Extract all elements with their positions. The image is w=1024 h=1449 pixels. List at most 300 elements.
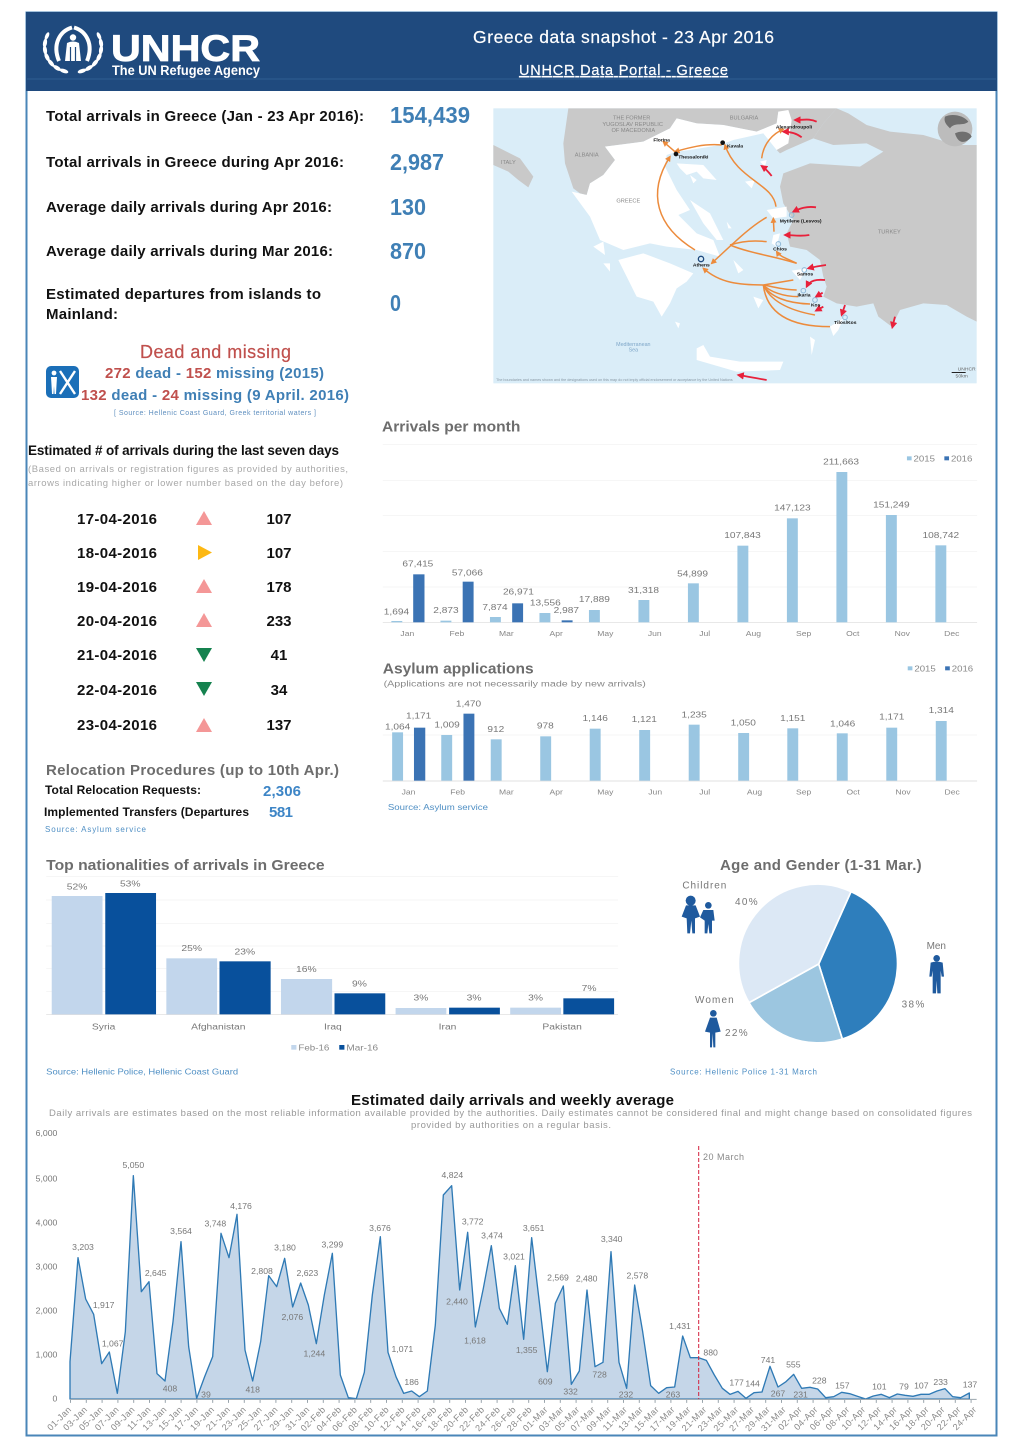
map labels [501, 115, 901, 354]
map labels: Alexandroupoli [776, 125, 813, 131]
row 22 Apr [77, 682, 288, 699]
value labels [72, 1160, 977, 1399]
legend: asylum [908, 663, 973, 673]
map labels: Mytilene (Lesvos) [780, 219, 822, 225]
legend: asylum: 2015 [914, 663, 936, 673]
header band [26, 12, 997, 91]
date axis labels: 09-Jan [109, 1404, 137, 1433]
heading: arrivals per month: Arrivals per month [382, 419, 520, 435]
value labels: 232 [619, 1389, 633, 1399]
y axis labels: 6,000 [36, 1128, 58, 1138]
bar chart: nationalities: 52% [67, 882, 88, 892]
bar chart: arrivals per month [383, 444, 977, 638]
date axis labels: 27-Jan [252, 1404, 280, 1433]
source: Source: Asylum service [45, 825, 147, 834]
date axis labels: 22-Apr [935, 1404, 963, 1432]
bar chart: asylum applications: Apr [550, 788, 563, 797]
bar chart: nationalities: Afghanistan [191, 1022, 246, 1032]
value labels: 3,676 [369, 1223, 391, 1233]
note: Daily arrivals are estimates based on the most reliable information available provided by the authorities. Daily estimates cannot be considered final and might change based on consolidated figures [49, 1108, 972, 1119]
value labels: 1,244 [303, 1348, 325, 1358]
value labels: 101 [872, 1382, 887, 1392]
red sea crossing arrows [738, 120, 895, 380]
value labels: 741 [761, 1355, 775, 1365]
value labels: 228 [812, 1376, 827, 1386]
map labels: Florina [653, 137, 670, 143]
stat: March daily average: 870 [390, 238, 426, 264]
bar chart: asylum applications: 1,046 [830, 718, 855, 728]
legend: arrivals: 2016 [951, 453, 972, 463]
bar chart: nationalities: Iraq [324, 1022, 342, 1032]
map labels: Athens [693, 263, 710, 269]
row 21 Apr [77, 647, 287, 664]
map labels: Kavala [727, 144, 743, 150]
row 18 Apr: 107 [266, 545, 292, 562]
bar chart: nationalities: 25% [181, 944, 203, 954]
value labels: 5,050 [122, 1160, 144, 1170]
y axis labels: 2,000 [36, 1305, 58, 1315]
value labels: 1,071 [391, 1344, 413, 1354]
stat: departures: 0 [390, 290, 401, 316]
panel: relocation procedures [44, 762, 339, 834]
date axis labels: 28-Feb [505, 1404, 534, 1433]
bar chart: asylum applications: Jan [402, 788, 415, 797]
date axis labels: 12-Feb [378, 1404, 407, 1433]
bar chart: nationalities: 7% [582, 984, 597, 994]
value labels: 1,067 [102, 1339, 124, 1349]
sea [493, 108, 977, 383]
map labels: ALBANIA [575, 153, 599, 159]
value labels: 609 [538, 1377, 553, 1387]
pie labels: 22% [725, 1028, 748, 1039]
bar chart: nationalities: 3% [414, 993, 429, 1003]
row 19 Apr [77, 579, 292, 596]
date axis labels: 18-Apr [903, 1404, 931, 1432]
bar chart: nationalities: 23% [235, 947, 256, 957]
bar chart: arrivals per month: 13,556 [530, 597, 561, 608]
value labels: 1,431 [669, 1321, 691, 1331]
note: provided by authorities on a regular basis. [411, 1120, 611, 1131]
value labels: 144 [745, 1378, 760, 1388]
date axis labels: 04-Feb [314, 1404, 343, 1433]
value labels: 2,578 [626, 1271, 648, 1281]
bar chart: arrivals per month: 31,318 [628, 585, 659, 595]
date axis labels: 07-Jan [93, 1404, 121, 1433]
date axis labels: 14-Apr [871, 1404, 899, 1432]
bar chart: asylum applications: 978 [537, 720, 554, 731]
date axis labels: 15-Mar [632, 1404, 661, 1433]
value labels: 3,021 [503, 1252, 525, 1262]
area and line [70, 1176, 969, 1399]
bar chart: asylum applications: 1,146 [583, 713, 608, 723]
row 19 Apr: 19-04-2016 [77, 579, 157, 596]
bar chart: asylum applications: 1,064 [385, 721, 410, 732]
bar chart: asylum applications: Jun [648, 788, 662, 797]
panel: age and gender [670, 857, 946, 1076]
bar chart: arrivals per month: Nov [895, 630, 910, 638]
stat: total arrivals: 154,439 [390, 102, 470, 128]
date axis labels: 31-Mar [759, 1404, 788, 1433]
date axis labels: 04-Apr [792, 1404, 820, 1432]
heading: Relocation Procedures (up to 10th Apr.) [46, 762, 339, 779]
map labels: YUGOSLAV REPUBLIC [602, 122, 663, 128]
stat: departures: Mainland: [46, 306, 118, 323]
date axis labels: 27-Mar [727, 1404, 756, 1433]
bar chart: nationalities [46, 877, 618, 1032]
date axis labels: 14-Feb [394, 1404, 423, 1433]
date axis labels: 20-Apr [919, 1404, 947, 1432]
value labels: 3,474 [481, 1231, 503, 1241]
bar chart: nationalities: 53% [120, 879, 141, 889]
note: arrows indicating higher or lower number based on the day before) [28, 478, 343, 489]
source: Source: Hellenic Police 1-31 March [670, 1067, 817, 1076]
date axis labels: 01-Jan [45, 1404, 73, 1433]
legend: asylum: 2016 [952, 663, 973, 673]
value labels: 408 [163, 1384, 177, 1394]
date axis labels: 17-Mar [648, 1404, 677, 1433]
transfers: Implemented Transfers (Departures [44, 805, 249, 819]
value labels: 4,824 [441, 1170, 463, 1180]
date axis labels: 16-Apr [887, 1404, 915, 1432]
date axis labels: 26-Feb [489, 1404, 518, 1433]
value labels: 3,564 [170, 1226, 192, 1236]
value labels: 263 [666, 1389, 680, 1399]
stat: April daily average: Average daily arrivals during Apr 2016: [46, 199, 332, 216]
requests: Total Relocation Requests: [45, 783, 201, 797]
bar chart: asylum applications: 1,314 [929, 705, 954, 715]
legend [291, 1043, 378, 1053]
date axis labels: 05-Jan [77, 1404, 105, 1433]
heading: Dead and missing [140, 342, 291, 362]
scale bar and disclaimer [496, 367, 976, 382]
legend: Feb-16 [298, 1043, 329, 1053]
value labels: 39 [201, 1389, 211, 1399]
bar chart: asylum applications: 1,171 [406, 710, 431, 721]
bar chart: asylum applications: Aug [747, 788, 762, 797]
note [28, 464, 348, 489]
map markers [674, 140, 847, 320]
value labels: 157 [835, 1380, 850, 1390]
bar chart: asylum applications: Dec [945, 788, 960, 797]
bar chart: asylum applications: Mar [499, 788, 514, 797]
charts: arrivals and asylum [382, 419, 977, 812]
date axis labels: 21-Mar [680, 1404, 709, 1433]
pie labels: 40% [735, 897, 758, 908]
map labels: Samos [797, 272, 813, 278]
value labels: 880 [703, 1347, 718, 1357]
date axis labels: 17-Jan [172, 1404, 200, 1433]
marker: 20 March: 20 March [703, 1152, 744, 1162]
bar chart: arrivals per month: Jan [400, 630, 414, 638]
bar chart: asylum applications: 1,121 [632, 714, 657, 724]
y axis labels: 4,000 [36, 1217, 58, 1227]
value labels: 3,651 [523, 1223, 545, 1233]
pie labels [682, 880, 946, 1039]
heading: Estimated # of arrivals during the last seven days [28, 443, 339, 458]
bar chart: asylum applications: 1,171 [879, 711, 904, 721]
value labels: 728 [592, 1369, 607, 1379]
bar chart: arrivals per month: May [597, 630, 613, 638]
row 23 Apr: 137 [266, 717, 292, 734]
pie labels: Women [695, 995, 734, 1006]
bar chart: arrivals per month: 7,874 [482, 602, 508, 612]
date axis labels: 23-Mar [696, 1404, 725, 1433]
map labels: TURKEY [878, 229, 901, 235]
date axis labels: 02-Apr [776, 1404, 804, 1432]
date axis labels: 31-Jan [283, 1404, 312, 1433]
row 19 Apr: 178 [266, 579, 292, 596]
value labels: 2,645 [145, 1268, 167, 1278]
value labels: 107 [914, 1380, 929, 1390]
value labels: 3,340 [601, 1234, 623, 1244]
row 23 Apr: 23-04-2016 [77, 717, 157, 734]
bar chart: asylum applications: Jul [699, 788, 710, 797]
source: asylum: Source: Asylum service [388, 803, 488, 812]
portal link: UNHCR Data Portal - Greece [519, 63, 728, 79]
bar chart: arrivals per month: 26,971 [503, 586, 534, 596]
note: asylum: (Applications are not necessarily made by new arrivals) [384, 679, 646, 689]
bar chart: arrivals per month: 107,843 [724, 530, 761, 540]
bar chart: arrivals per month: Oct [846, 630, 860, 638]
date axis labels: 23-Jan [220, 1404, 248, 1433]
map labels: THE FORMER [613, 115, 650, 121]
date axis labels: 03-Jan [61, 1404, 89, 1433]
value labels: 3,772 [462, 1216, 484, 1226]
bar chart: nationalities: Syria [92, 1022, 116, 1032]
bar chart: arrivals per month: Jul [699, 630, 710, 638]
row 17 Apr [77, 511, 292, 528]
row 18 Apr: 18-04-2016 [77, 545, 157, 562]
row 21 Apr: 41 [271, 647, 287, 664]
icon: man [929, 955, 944, 993]
row 21 Apr: 21-04-2016 [77, 647, 157, 664]
date axis labels: 21-Jan [204, 1404, 232, 1433]
legend: arrivals: 2015 [914, 453, 935, 463]
land: Greece [572, 110, 843, 372]
date axis labels: 02-Feb [299, 1404, 328, 1433]
pie chart [738, 884, 898, 1043]
stat: April daily average [46, 194, 426, 220]
heading: Estimated daily arrivals and weekly average [351, 1092, 674, 1109]
tagline: The UN Refugee Agency [112, 63, 260, 78]
map of Greece and arrival routes [493, 108, 977, 383]
requests [45, 783, 301, 800]
source: [ Source: Hellenic Coast Guard, Greek territorial waters ] [114, 410, 316, 417]
axis [70, 1399, 977, 1401]
bar chart: asylum applications: 912 [487, 724, 504, 734]
wordmark: UNHCR [111, 28, 260, 69]
icon: person and X [46, 366, 79, 398]
bar chart: arrivals per month: 67,415 [402, 558, 433, 569]
pie labels: 38% [902, 999, 924, 1010]
orange land and sea routes [658, 129, 830, 327]
bar chart: asylum applications: Feb [450, 788, 466, 797]
bar chart: asylum applications: May [597, 788, 613, 797]
heading: asylum applications: Asylum applications [383, 660, 534, 677]
requests: 2,306 [263, 783, 301, 800]
date axis labels: 03-Mar [537, 1404, 566, 1433]
value labels: 3,748 [204, 1218, 226, 1228]
value labels: 1,917 [93, 1300, 115, 1310]
date axis labels: 24-Feb [473, 1404, 502, 1433]
bar chart: nationalities: 3% [467, 993, 482, 1003]
value labels: 2,623 [296, 1268, 318, 1278]
bar chart: asylum applications: 1,009 [434, 719, 460, 730]
date axis labels: 07-Mar [568, 1404, 597, 1433]
date axis labels: 13-Jan [140, 1404, 169, 1433]
date axis labels: 19-Jan [188, 1404, 216, 1433]
bar chart: asylum applications: 1,235 [682, 709, 707, 719]
bar chart: asylum applications: Oct [846, 788, 861, 797]
date axis labels: 22-Feb [457, 1404, 486, 1433]
date axis labels: 11-Jan [125, 1404, 153, 1432]
panel: daily arrivals [36, 1092, 979, 1433]
bar chart: arrivals per month: 211,663 [823, 456, 859, 466]
date axis labels: 19-Mar [664, 1404, 693, 1433]
bar chart: arrivals per month: Dec [944, 630, 959, 638]
value labels: 2,808 [251, 1266, 273, 1276]
date axis labels: 18-Feb [426, 1404, 455, 1433]
stat: departures: Estimated departures from islands to [46, 286, 321, 303]
row 22 Apr: 34 [271, 682, 288, 699]
row 17 Apr: 107 [266, 511, 292, 528]
value labels: 177 [729, 1378, 744, 1388]
bar chart: arrivals per month: 108,742 [923, 530, 959, 540]
date axis labels: 09-Mar [584, 1404, 613, 1433]
map labels: BULGARIA [730, 115, 759, 121]
bar chart: arrivals per month: 57,066 [452, 567, 483, 577]
panel: top nationalities [46, 857, 618, 1076]
legend: Mar-16 [346, 1043, 378, 1053]
date axis labels: 20-Feb [441, 1404, 470, 1433]
date axis labels: 08-Feb [346, 1404, 375, 1433]
stat: April arrivals [46, 149, 444, 175]
value labels: 332 [563, 1387, 578, 1397]
value labels: 3,299 [321, 1239, 343, 1249]
panel: last seven days [28, 443, 348, 734]
date axis labels: 29-Mar [743, 1404, 772, 1433]
map labels: Kos [811, 303, 821, 309]
transfers: 581 [269, 804, 293, 821]
value labels: 418 [245, 1385, 260, 1395]
row 23 Apr [77, 717, 292, 734]
date axis labels: 24-Apr [951, 1404, 979, 1432]
bar chart: arrivals per month: 147,123 [774, 502, 811, 513]
map labels: Sea [629, 348, 638, 354]
date axis labels: 08-Apr [824, 1404, 852, 1432]
heading: Age and Gender (1-31 Mar.) [720, 857, 922, 874]
bar chart: asylum applications: 1,470 [456, 698, 481, 708]
date axis labels: 16-Feb [410, 1404, 439, 1433]
stat: April arrivals: 2,987 [390, 149, 444, 175]
bar chart: arrivals per month: 2,987 [554, 605, 579, 615]
value labels: 3,203 [72, 1242, 94, 1252]
value labels: 79 [899, 1382, 909, 1392]
note [49, 1108, 972, 1131]
row 18 Apr [77, 545, 292, 562]
map labels: OF MACEDONIA [611, 128, 655, 134]
bar chart: arrivals per month: Sep [796, 630, 812, 638]
bar chart: arrivals per month: 17,889 [579, 594, 610, 604]
bar chart: arrivals per month: 151,249 [873, 499, 910, 509]
transfers [44, 804, 293, 821]
map labels: Chios [773, 247, 787, 253]
map labels: Mediterranean [616, 342, 651, 348]
bar chart: arrivals per month: Apr [550, 630, 563, 638]
value labels: 233 [933, 1377, 948, 1387]
date axis labels: 10-Feb [362, 1404, 391, 1433]
row 22 Apr: 22-04-2016 [77, 682, 157, 699]
icon: children [682, 896, 715, 933]
map labels: Tilos/Kos [834, 320, 857, 326]
map labels: ITALY [501, 160, 516, 166]
value labels: 4,176 [230, 1201, 252, 1211]
value labels: 2,569 [547, 1273, 569, 1283]
value labels: 1,618 [464, 1335, 486, 1345]
stat: total arrivals [46, 102, 470, 128]
title: Greece data snapshot - 23 Apr 2016 [473, 27, 774, 47]
bar chart: asylum applications: Nov [895, 788, 911, 797]
land: neighbouring countries [493, 108, 977, 327]
y axis labels [36, 1128, 58, 1403]
value labels: 267 [771, 1388, 785, 1398]
date axis labels: 10-Apr [840, 1404, 867, 1432]
date axis labels: 15-Jan [156, 1404, 185, 1433]
bar chart: asylum applications: Sep [796, 788, 812, 797]
map labels: Ikaria [797, 292, 811, 298]
y axis labels: 3,000 [36, 1261, 58, 1271]
2016 figures: 132 dead - 24 missing (9 April. 2016) [81, 387, 349, 404]
pie labels: Men [927, 941, 946, 952]
stat: March daily average: Average daily arrivals during Mar 2016: [46, 243, 333, 260]
bar chart: arrivals per month: Aug [746, 630, 761, 638]
row 20 Apr [77, 613, 292, 630]
bar chart: asylum applications: 1,050 [731, 717, 756, 727]
y axis labels: 1,000 [36, 1349, 58, 1359]
bar chart: arrivals per month: 2,873 [433, 605, 459, 615]
row 17 Apr: 17-04-2016 [77, 511, 157, 528]
bar chart: arrivals per month: Feb [449, 630, 465, 638]
bar chart: nationalities: 16% [296, 965, 317, 975]
date axis labels: 12-Apr [855, 1404, 883, 1432]
bar chart: nationalities: Pakistan [542, 1022, 582, 1032]
value labels: 2,440 [446, 1297, 468, 1307]
map labels: GREECE [616, 199, 641, 205]
stat: departures [46, 286, 401, 323]
date axis labels: 29-Jan [267, 1404, 296, 1433]
value labels: 1,355 [516, 1345, 538, 1355]
bar chart: arrivals per month: Mar [499, 630, 514, 638]
heading: Top nationalities of arrivals in Greece [46, 857, 325, 874]
date axis labels: 25-Jan [236, 1404, 264, 1433]
area chart: daily arrivals [36, 1128, 977, 1403]
row 20 Apr: 20-04-2016 [77, 613, 157, 630]
date axis labels: 05-Mar [553, 1404, 582, 1433]
value labels: 2,076 [281, 1312, 303, 1322]
date axis labels: 11-Mar [601, 1404, 629, 1433]
date axis labels: 06-Feb [330, 1404, 359, 1433]
bar chart: nationalities: Iran [439, 1022, 456, 1032]
stat: April arrivals: Total arrivals in Greece during Apr 2016: [46, 154, 344, 171]
row 20 Apr: 233 [266, 613, 292, 630]
scale bar and disclaimer: The boundaries and names shown and the designations used on this map do not imply official endorsement or acceptance by the United Nations [496, 378, 733, 382]
date axis labels: 06-Apr [808, 1404, 836, 1432]
dead and missing panel [46, 342, 349, 417]
bar chart: nationalities: 9% [352, 979, 368, 989]
date axis labels [45, 1404, 979, 1433]
note: (Based on arrivals or registration figures as provided by authorities, [28, 464, 348, 475]
value labels: 231 [793, 1389, 808, 1399]
